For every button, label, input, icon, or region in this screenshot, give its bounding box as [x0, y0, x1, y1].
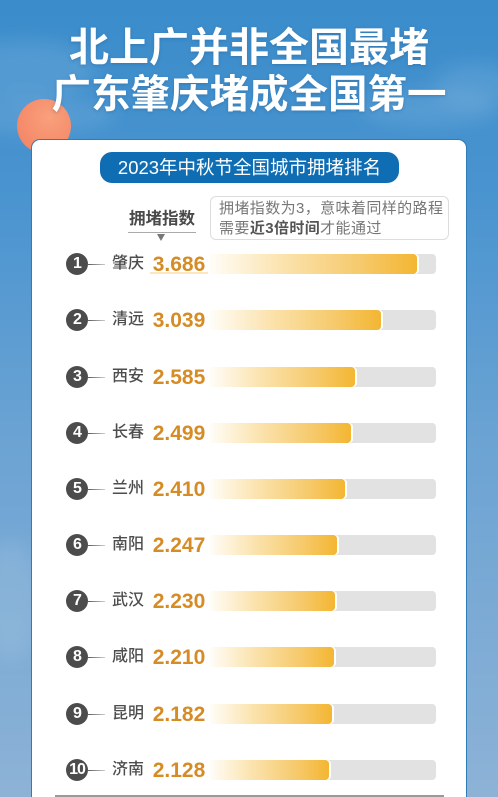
row 3: 2.585: [153, 366, 205, 389]
row 6: 南阳: [112, 536, 144, 553]
row 9: [66, 703, 436, 726]
row 6: 6: [73, 536, 81, 553]
row 7: 武汉: [112, 592, 144, 609]
row 10: 10: [69, 761, 85, 778]
row 1: 3.686: [153, 253, 205, 276]
row 3: [66, 366, 436, 389]
column heading: congestion index: 拥堵指数: [129, 210, 195, 228]
row 1: 1: [73, 255, 81, 272]
row 2: 清远: [112, 311, 144, 328]
column heading: congestion index: [128, 210, 196, 241]
row 4: 长春: [112, 424, 144, 441]
row 10: 济南: [112, 761, 144, 778]
row 5: 5: [73, 480, 81, 497]
row 2: 3.039: [153, 309, 205, 332]
row 8: 咸阳: [112, 648, 144, 665]
row 8: [66, 646, 436, 669]
row 10: [66, 759, 436, 782]
row 3: 3: [73, 368, 81, 385]
divider at bottom: [55, 795, 444, 797]
row 4: 2.499: [153, 422, 205, 445]
callout: index explanation: 拥堵指数为3，意味着同样的路程: [219, 200, 443, 217]
row 5: 2.410: [153, 478, 205, 501]
row 5: 兰州: [112, 480, 144, 497]
row 9: 昆明: [112, 705, 144, 722]
row 4: 4: [73, 424, 81, 441]
row 1: [66, 253, 436, 276]
row 5: [66, 478, 436, 501]
row 2: 2: [73, 311, 81, 328]
row 4: [66, 422, 436, 445]
row 6: [66, 534, 436, 557]
panel: ranking card: [32, 140, 466, 797]
row 9: 9: [73, 705, 81, 722]
title line 2: 广东肇庆堵成全国第一: [52, 73, 446, 117]
panel heading pill: 2023年中秋节全国城市拥堵排名: [118, 157, 381, 178]
row 7: 7: [73, 592, 81, 609]
panel heading pill: [100, 152, 399, 183]
callout: index explanation: 需要近3倍时间才能通过: [219, 220, 382, 237]
row 9: 2.182: [153, 703, 205, 726]
icon: sun: [17, 99, 71, 153]
row 10: 2.128: [153, 759, 205, 782]
row 2: [66, 309, 436, 332]
row 7: 2.230: [153, 590, 205, 613]
row 3: 西安: [112, 368, 144, 385]
title: [52, 26, 446, 117]
title line 1: 北上广并非全国最堵: [69, 26, 429, 70]
row 7: [66, 590, 436, 613]
row 6: 2.247: [153, 534, 205, 557]
row 8: 8: [73, 648, 81, 665]
row 1: 肇庆: [112, 255, 144, 272]
callout: index explanation: [210, 196, 449, 240]
row 8: 2.210: [153, 646, 205, 669]
